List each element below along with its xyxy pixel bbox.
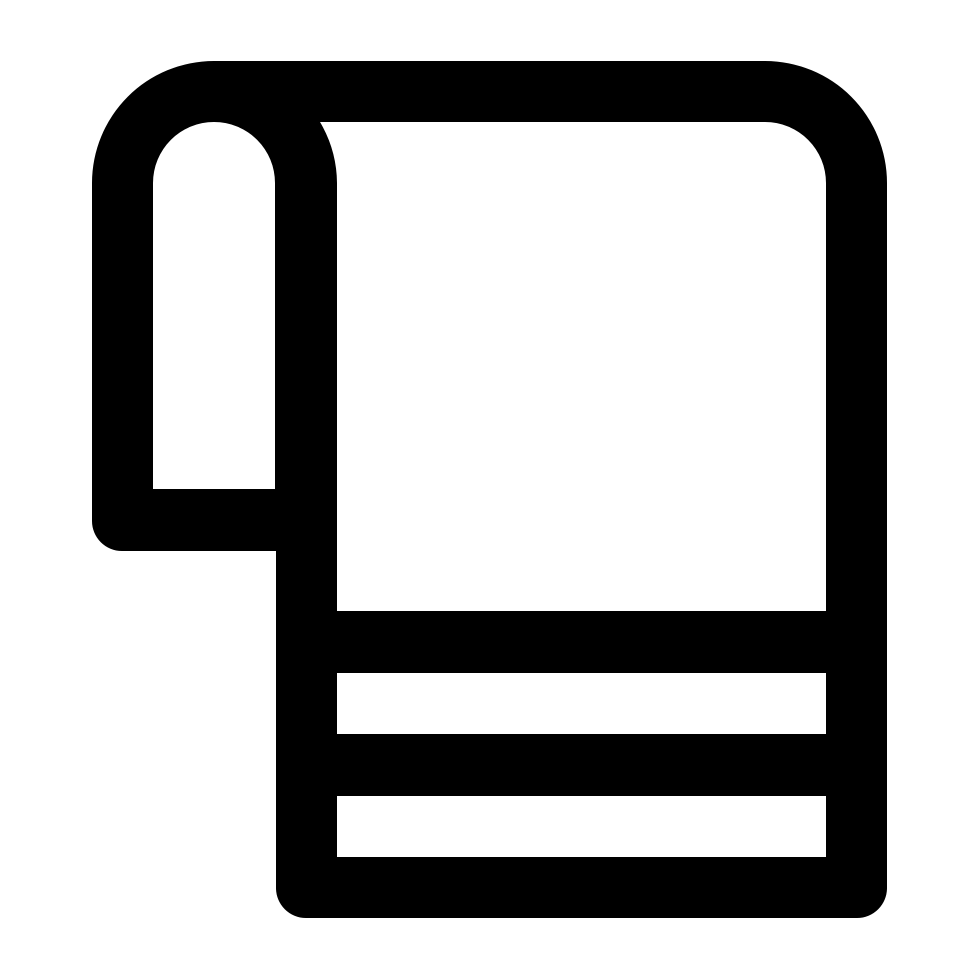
icon: towel xyxy=(92,61,887,918)
